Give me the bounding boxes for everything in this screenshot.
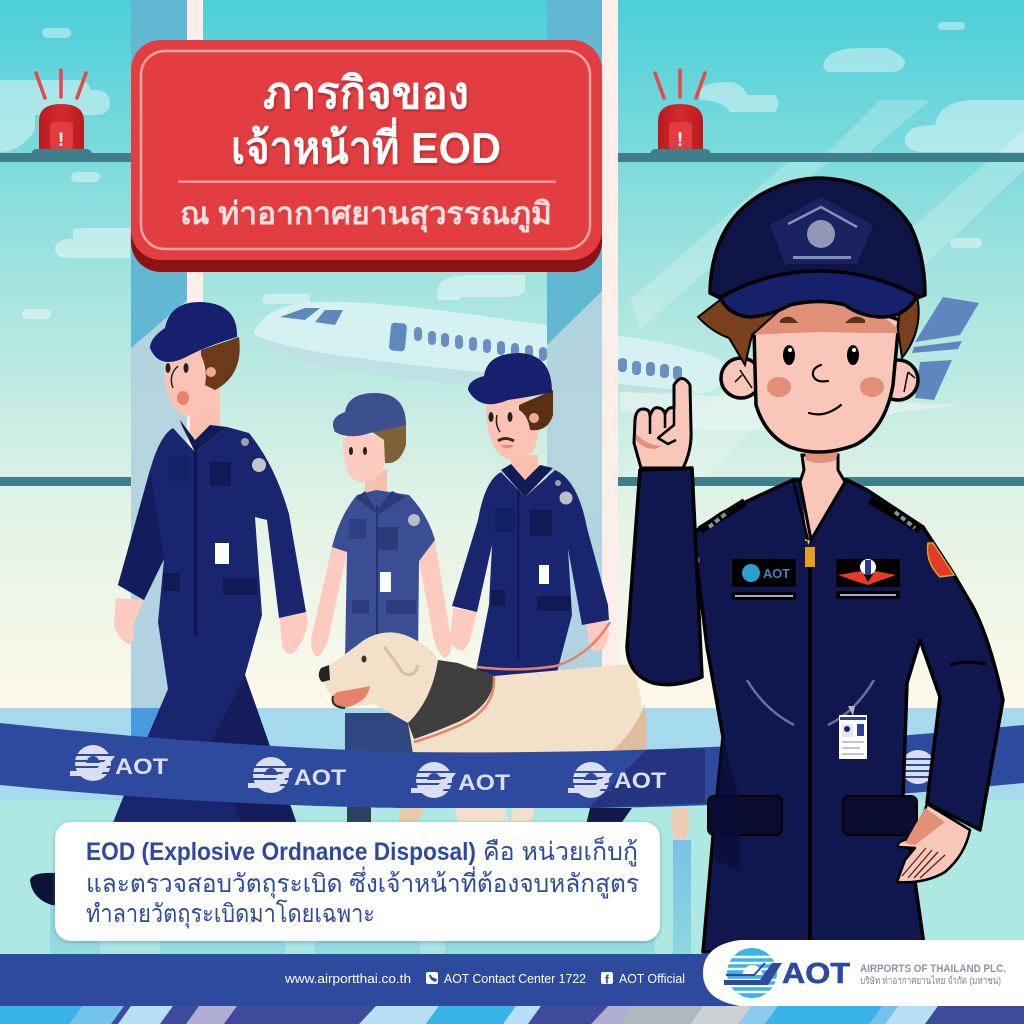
side shadows xyxy=(713,737,740,870)
main officer xyxy=(627,178,1003,952)
eyes xyxy=(783,345,795,365)
logo mark xyxy=(724,948,850,998)
ribbon logo 2 xyxy=(248,757,347,793)
company name: AIRPORTS OF THAILAND PLC. xyxy=(860,963,1006,975)
officer walking right xyxy=(450,353,609,676)
id card xyxy=(839,706,867,759)
officer walking back (pale) xyxy=(311,393,452,825)
AOT logo panel xyxy=(703,940,1024,1006)
window beams xyxy=(0,153,1024,486)
siren left xyxy=(31,70,92,156)
description text: EOD (Explosive Ordnance Disposal)คือ หน่วยเก็บกู้ xyxy=(86,836,638,867)
title text xyxy=(231,69,501,173)
raised hand xyxy=(634,378,691,468)
dog legs and feet below ribbon xyxy=(30,808,691,954)
lower hand xyxy=(897,804,970,882)
footer contacts: f xyxy=(605,972,610,986)
hair xyxy=(698,296,919,365)
raised arm xyxy=(627,468,702,685)
ribbon xyxy=(0,723,1024,808)
leash xyxy=(477,622,610,669)
ribbon logo 5 xyxy=(900,750,936,784)
footer stripes xyxy=(0,1006,1024,1024)
ribbon logo 1 xyxy=(70,745,169,781)
clouds xyxy=(0,22,1024,319)
title text: เจ้าหน้าที่ EOD xyxy=(231,117,501,173)
siren right: ! xyxy=(677,130,683,151)
airplane xyxy=(254,297,979,430)
footer bar xyxy=(0,954,1024,1006)
description text xyxy=(86,836,639,929)
footer contacts: AOT Official xyxy=(619,972,685,986)
ribbon logo 4: AOT xyxy=(614,768,667,793)
ears xyxy=(721,358,761,398)
cap xyxy=(710,178,925,317)
body xyxy=(693,480,1003,952)
siren right xyxy=(650,70,711,156)
pillars xyxy=(131,0,618,840)
nose and mouth xyxy=(809,365,841,414)
chest patch wings xyxy=(836,559,900,599)
ribbon logo 4 xyxy=(568,762,667,798)
pockets xyxy=(708,796,782,835)
ribbon logo 2: AOT xyxy=(294,765,347,790)
footer contacts xyxy=(284,972,685,986)
ribbon logo 1: AOT xyxy=(115,754,169,779)
description text: และตรวจสอบวัตถุระเบิด ซึ่งเจ้าหน้าที่ต้องจบหลักสูตร xyxy=(86,866,639,899)
ribbon logo 3 xyxy=(411,762,511,798)
logo mark: AOT xyxy=(782,958,850,990)
face xyxy=(754,290,899,452)
shoulder tabs xyxy=(700,500,920,530)
title card xyxy=(131,40,602,272)
footer contacts: www.airportthai.co.th xyxy=(284,972,411,986)
ribbon logo 3: AOT xyxy=(458,770,511,795)
red shoulder patch xyxy=(928,543,954,577)
chest patch AOT: AOT xyxy=(763,566,790,581)
pocket zips xyxy=(747,680,874,725)
officer walking left xyxy=(110,302,308,830)
footer contacts: AOT Contact Center 1722 xyxy=(444,972,586,986)
title text: ภารกิจของ xyxy=(263,69,469,118)
cheeks xyxy=(767,377,791,397)
dog xyxy=(319,622,646,760)
subtitle: ณ ท่าอากาศยานสุวรรณภูมิ xyxy=(180,196,552,233)
description box xyxy=(55,822,660,941)
siren left: ! xyxy=(58,130,64,151)
chest patch AOT xyxy=(732,559,796,600)
description text: ทำลายวัตถุระเบิดมาโดยเฉพาะ xyxy=(86,899,375,929)
